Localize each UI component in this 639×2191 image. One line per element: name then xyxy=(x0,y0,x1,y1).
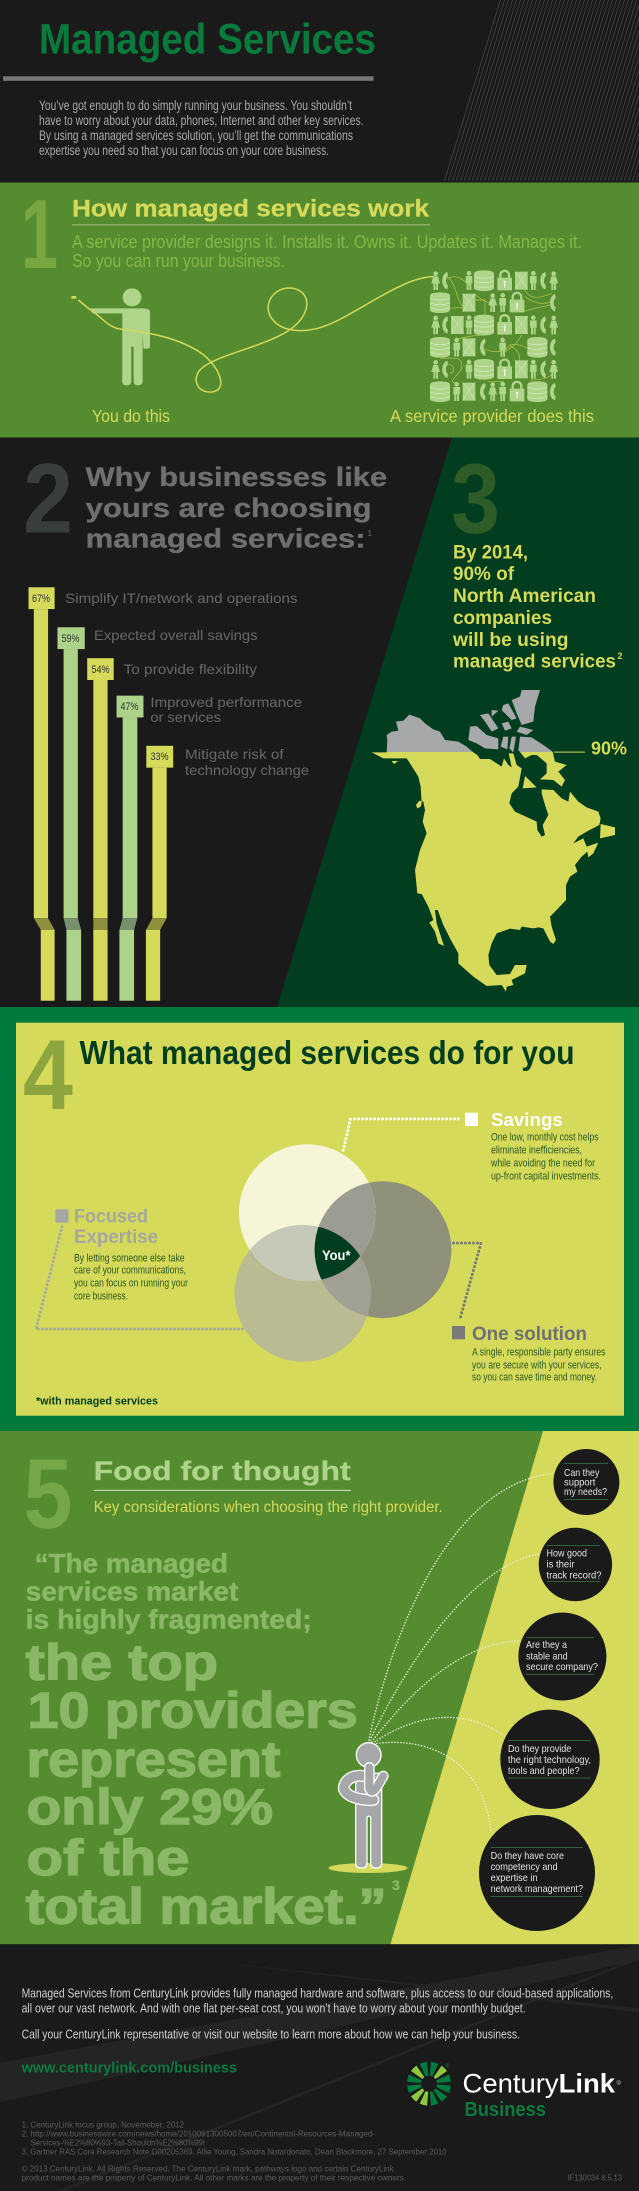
map: north america xyxy=(372,690,615,992)
bar labels xyxy=(65,590,309,778)
heading: Why businesses like xyxy=(86,462,387,492)
heading: What managed services do for you xyxy=(80,1035,574,1072)
bar 54% xyxy=(87,658,114,1001)
circle: technology: the right technology, xyxy=(508,1754,591,1766)
quote: the top xyxy=(26,1634,218,1690)
icon: person with cable xyxy=(71,277,434,392)
circle: core competency: network management? xyxy=(491,1883,583,1895)
circle: core competency: competency and xyxy=(491,1861,558,1873)
website: www.centurylink.com/business xyxy=(21,2061,237,2077)
bar labels: To provide flexibility xyxy=(124,661,257,677)
callout: savings: One low, monthly cost helps xyxy=(491,1132,599,1144)
panel: header xyxy=(0,0,639,182)
icon grid: managed technology xyxy=(430,270,558,402)
quote: total market.” xyxy=(26,1878,387,1934)
captions xyxy=(92,406,594,426)
description xyxy=(72,232,582,271)
logo: CenturyLink: CenturyLink xyxy=(462,2069,616,2099)
intro text xyxy=(39,98,364,158)
intro text: have to worry about your data, phones, Internet and other key services. xyxy=(39,113,364,128)
logo: CenturyLink: ® xyxy=(445,2063,450,2070)
statement: companies xyxy=(453,608,552,629)
panel: section 4 what managed services do xyxy=(0,1007,639,1431)
callout: one solution: A single, responsible party ensures xyxy=(472,1347,606,1359)
question circles xyxy=(479,1449,619,1931)
panel: footer xyxy=(0,1944,639,2191)
panel: section 5 food for thought xyxy=(0,1431,639,1944)
bar labels: technology change xyxy=(185,762,309,778)
number 5: 5 xyxy=(24,1438,72,1549)
circle: stable company: Are they a xyxy=(526,1639,567,1651)
bar 59% xyxy=(57,627,85,1001)
description: So you can run your business. xyxy=(72,251,285,271)
statement: managed services xyxy=(453,652,616,673)
venn diagram: You* xyxy=(322,1247,351,1263)
bar 67% xyxy=(29,587,55,1001)
statement: By 2014, xyxy=(453,542,528,564)
callout: savings xyxy=(342,1109,601,1183)
callout: focused expertise: Expertise xyxy=(74,1227,158,1248)
circle: technology: tools and people? xyxy=(508,1765,580,1777)
bar values: 47% xyxy=(120,701,139,713)
90 percent marker: 90% xyxy=(591,739,627,759)
intro text: You’ve got enough to do simply running your business. You shouldn’t xyxy=(39,98,352,113)
bar values: 67% xyxy=(32,593,50,605)
statement xyxy=(452,542,623,673)
bar values: 54% xyxy=(92,664,110,676)
references: product names are the property of CenturyLink. All other marks are the property of their respective owners. xyxy=(22,2172,406,2182)
quote: 3 xyxy=(392,1877,400,1893)
references: 2. http://www.businesswire.com/news/home/20100913005007/en/Continental-Resources-Managed- xyxy=(22,2128,375,2138)
callout: one solution xyxy=(452,1243,606,1384)
panel: section 3 north america xyxy=(277,438,639,1007)
bar labels: Expected overall savings xyxy=(94,627,258,643)
bar 33% xyxy=(146,746,173,1001)
quote: represent xyxy=(26,1732,281,1788)
bar chart: reasons xyxy=(29,587,309,1001)
circle: technology: Do they provide xyxy=(508,1743,571,1755)
heading: managed services: xyxy=(86,524,366,554)
references: Services-%E2%80%93-Tail-Shouldn%E2%80%99t xyxy=(31,2137,206,2147)
bar labels: Simplify IT/network and operations xyxy=(65,590,298,606)
statement: North American xyxy=(453,586,596,607)
circle: support: my needs? xyxy=(564,1486,607,1498)
description: A service provider designs it. Installs it. Owns it. Updates it. Manages it. xyxy=(72,232,582,252)
circle: track record xyxy=(539,1528,612,1601)
references xyxy=(22,2119,622,2182)
statement: 90% of xyxy=(453,564,515,585)
callout: focused expertise: care of your communications, xyxy=(74,1265,186,1277)
circle: core competency xyxy=(479,1815,595,1931)
number 1: 1 xyxy=(21,179,58,289)
circle: support xyxy=(553,1449,619,1515)
bar values: 33% xyxy=(150,751,169,763)
quote: 10 providers xyxy=(28,1682,358,1738)
bar labels: or services xyxy=(150,709,221,725)
quote: only 29% xyxy=(26,1779,273,1835)
callout: focused expertise xyxy=(36,1207,244,1329)
dotted thought lines xyxy=(369,1473,554,1833)
heading: 1 xyxy=(368,529,372,538)
callout: focused expertise: you can focus on running your xyxy=(74,1278,188,1290)
closing text: all over our vast network. And with one flat per-seat cost, you won’t have to worry about your monthly budget. xyxy=(22,2001,526,2016)
circle: track record: track record? xyxy=(546,1569,602,1581)
captions: You do this xyxy=(92,406,170,426)
heading: How managed services work xyxy=(72,196,429,223)
quote: is highly fragmented; xyxy=(26,1605,312,1635)
references: © 2013 CenturyLink. All Rights Reserved. The CenturyLink mark, pathways logo and certain CenturyLink xyxy=(22,2163,394,2173)
callout: focused expertise: Focused xyxy=(74,1207,148,1228)
captions: A service provider does this xyxy=(390,406,594,426)
panel: section 1 how managed services work xyxy=(0,179,639,438)
circle: stable company: stable and xyxy=(526,1650,568,1662)
number 2: 2 xyxy=(23,443,73,554)
number 4: 4 xyxy=(23,1019,73,1130)
circle: support: Can they xyxy=(564,1467,600,1479)
intro text: expertise you need so that you can focus on your core business. xyxy=(39,143,329,158)
bar values xyxy=(32,593,169,763)
circle: core competency: expertise in xyxy=(491,1872,538,1884)
venn diagram xyxy=(234,1144,451,1362)
icon: thinking person xyxy=(328,1743,408,1873)
callout: savings: eliminate inefficiencies, xyxy=(491,1145,582,1157)
callout: one solution: so you can save time and money. xyxy=(472,1372,597,1384)
footnote: *with managed services xyxy=(36,1396,158,1408)
heading: yours are choosing xyxy=(86,493,372,523)
callout: savings: while avoiding the need for xyxy=(490,1158,595,1170)
circle: stable company: secure company? xyxy=(526,1661,598,1673)
references: 3. Gartner RAS Core Research Note G00205369, Allie Young, Sandra Notardonato, Dean Blackmore, 27 September 2010 xyxy=(22,2146,447,2156)
title: Managed Services xyxy=(39,15,376,63)
quote: services market xyxy=(26,1577,238,1607)
callout: savings: up-front capital investments. xyxy=(491,1171,601,1183)
panel: section 2 why businesses xyxy=(0,438,452,1007)
heading xyxy=(86,462,387,554)
circle: technology xyxy=(500,1710,600,1809)
quote: of the xyxy=(26,1830,190,1886)
subheading: Key considerations when choosing the right provider. xyxy=(94,1499,443,1516)
references: 1. CenturyLink focus group, Novemeber, 2012 xyxy=(22,2119,184,2129)
logo: CenturyLink xyxy=(407,2061,622,2121)
circle: stable company xyxy=(518,1612,606,1700)
callout: one solution: you are secure with your services, xyxy=(472,1360,602,1372)
bar labels: Improved performance xyxy=(150,694,302,710)
circle: core competency: Do they have core xyxy=(491,1850,564,1862)
quote xyxy=(26,1549,400,1934)
circle: track record: How good xyxy=(546,1547,587,1559)
statement: 2 xyxy=(618,651,623,661)
logo: CenturyLink: Business xyxy=(464,2099,546,2121)
circle: track record: is their xyxy=(546,1558,575,1570)
intro text: By using a managed services solution, you’ll get the communications xyxy=(39,128,353,143)
callout: savings: Savings xyxy=(491,1109,563,1130)
statement: will be using xyxy=(452,630,568,651)
callout: one solution: One solution xyxy=(472,1323,587,1345)
references: IF130034 8.5.13 xyxy=(568,2172,622,2182)
bar labels: Mitigate risk of xyxy=(185,746,284,762)
number 3: 3 xyxy=(451,443,500,554)
closing text: Call your CenturyLink representative or visit our website to learn more about how we can help your business. xyxy=(22,2027,520,2042)
logo: CenturyLink: ® xyxy=(616,2080,622,2087)
90 percent marker xyxy=(554,739,627,759)
closing text xyxy=(22,1986,613,2042)
bar 47% xyxy=(117,696,143,1001)
heading: Food for thought xyxy=(94,1456,351,1486)
bar values: 59% xyxy=(62,633,80,645)
callout: focused expertise: By letting someone else take xyxy=(74,1253,185,1265)
quote: “The managed xyxy=(35,1549,228,1579)
callout: focused expertise: core business. xyxy=(74,1291,128,1303)
circle: support: support xyxy=(564,1476,595,1488)
